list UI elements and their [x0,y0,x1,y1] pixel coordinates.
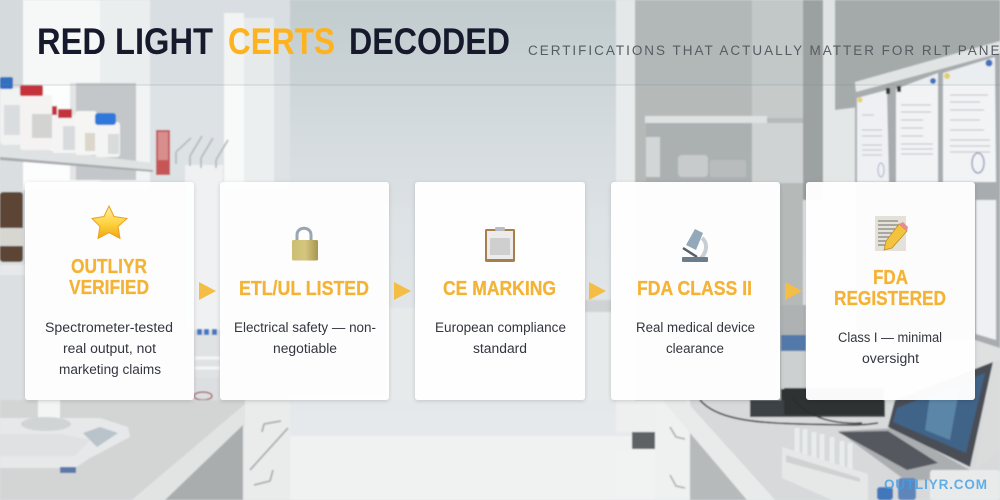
fire sign [156,130,170,175]
lower right shelf [389,308,616,400]
test tube caps [197,329,217,335]
text line 1: Electrical safety — non- [234,320,376,335]
bottle 5 label [108,134,119,154]
icon: microscope [682,229,708,262]
cap blue 1 [0,77,13,89]
shelf shade [0,157,153,172]
heading line 1: FDA [873,266,908,289]
certificate 1 [857,90,889,182]
upright light edge [70,83,76,180]
laptop keyboard [838,431,938,470]
scale foot [60,467,76,473]
memo paper [875,216,906,251]
clipboard board [485,229,515,262]
pin yellow 3 [944,73,950,79]
floor wall dark block [632,432,655,449]
cap red 3 [58,109,72,118]
padlock body [292,240,318,260]
padlock shackle [297,228,311,240]
microscope stage [683,248,697,257]
bottle 3 [52,115,76,153]
watermark: OUTLIYR.COM [884,477,987,492]
text line 2: clearance [666,341,724,356]
white door frame [823,0,858,200]
header tint band [0,0,1000,85]
title [37,21,510,62]
bottle white 2 [20,95,52,150]
pin blue 3 [986,60,992,66]
icon: star [92,206,127,238]
bottle 3 label [63,126,76,150]
text line 1: European compliance [435,320,566,335]
pin black 2 [897,86,901,92]
mid wall [150,0,290,190]
cap blue 5 [95,113,116,125]
left lower wall [0,190,290,400]
laptop base [838,428,970,480]
floor right [616,400,655,432]
laptop lid [888,362,993,467]
text line 2: negotiable [273,341,337,356]
card 4: FDA Class II [611,182,780,400]
balance scale glass [38,400,60,424]
board rim [855,41,1000,92]
strip band right [585,300,616,312]
floor lower right [616,449,655,500]
test tubes right [797,428,850,471]
arrow 2 [394,282,411,300]
card 5 panel [806,182,975,400]
pin yellow 1 [858,98,862,102]
balance scale body [0,418,130,468]
left wall strip [0,0,23,190]
lab shelf [0,144,153,170]
bottle small red cap [52,106,57,115]
cabinet handles [670,427,685,488]
certificate text lines [862,95,990,155]
right bottom cap 2 [898,478,916,500]
white column [616,0,635,400]
counter edge [132,400,273,500]
certificate stamp [972,153,984,173]
card 5 text [838,330,942,366]
drawers [245,400,290,500]
card 3: CE Marking [415,182,585,400]
alcove [635,0,803,400]
microscope arm [701,238,706,258]
text line 2: standard [473,341,527,356]
card 2 text [234,320,376,356]
reflection side [244,18,274,183]
balance scale top [0,434,90,456]
alcove box [710,160,746,177]
dark cabinet [165,425,243,500]
text line 1: Real medical device [636,320,755,335]
instrument base [781,351,806,389]
arrow 1 [199,282,216,300]
icon: memo and pencil [875,216,908,251]
lower right rim [975,340,1000,400]
red coil [194,392,212,400]
bottle right [930,470,1000,500]
text line 3: marketing claims [59,362,161,377]
drawer seam and handles [250,421,288,485]
certificate 3 [943,57,996,182]
alcove objects [678,155,708,177]
pencil eraser [899,222,908,231]
arrow 3 [589,282,606,300]
floor [290,436,660,500]
right bottom cap [877,487,893,500]
memo handwriting [878,221,902,245]
card 3 panel [415,182,585,400]
large wall [290,0,616,436]
card 2 panel [220,182,389,400]
bright window [23,0,100,190]
card 2: ETL/UL Listed [220,182,389,400]
text line 1: Spectrometer-tested [45,320,173,335]
right wall lower wedge [835,30,1000,110]
certificate 2 [896,73,938,182]
card 1 heading [69,255,149,299]
card 4 heading: FDA CLASS II [637,277,752,300]
light pillar [100,0,150,190]
strip instrument grey [781,305,806,335]
title: CERTS: CERTS [228,21,335,62]
alcove books [646,137,660,177]
text line 2: real output, not [63,341,156,356]
bottle 4 [75,111,97,155]
column shade [803,0,823,200]
lab counter left [0,400,250,500]
tube rack [782,447,868,500]
card 3 heading: CE MARKING [443,277,556,300]
text line 1: Class I — minimal [838,330,942,345]
instrument body [750,400,885,417]
card 1 text [45,320,173,377]
card 3 text [435,320,566,356]
pin blue 2 [930,78,936,84]
arrow 4 [785,282,802,300]
bottle 4 label [85,133,98,151]
card 1: Outliyr Verified [25,182,194,400]
clipboard paper [487,231,513,259]
white coat [185,165,223,330]
grey cabinet [690,432,747,500]
microscope tube [686,229,703,250]
text line 2: oversight [862,351,919,366]
card 2 heading: ETL/UL LISTED [239,277,369,300]
title: RED LIGHT: RED LIGHT [37,21,213,62]
white cabinet [655,400,690,500]
laptop screen glow [925,385,960,440]
lower shelf [0,265,25,275]
clipboard clip [495,227,505,231]
rack gap [786,455,860,482]
heading line 2: VERIFIED [69,276,149,299]
hooks [176,136,228,168]
instrument blue display [781,335,806,351]
bottle 1 label [4,105,21,135]
shelf metal upright [70,83,136,180]
bottle 2 label [32,114,52,138]
lower right certificate [976,200,996,340]
laptop screen [893,373,985,453]
icon: clipboard [485,227,515,262]
title: DECODED: DECODED [349,21,510,62]
alcove shelf [645,116,767,123]
laptop right counter [975,360,1000,470]
heading line 2: REGISTERED [834,287,946,310]
window reflection [224,13,244,183]
card 5 heading [834,266,946,310]
card 5: FDA Registered [806,182,975,400]
header divider [0,84,1000,86]
lower right board [975,182,1000,382]
brown bottles [0,192,23,262]
cap red 2 [20,85,43,96]
fire sign panel [158,132,168,160]
test tube rack lab [195,335,220,378]
brown bottle labels [0,228,23,246]
bottle white 1 [0,88,22,145]
alcove recess side [752,123,803,183]
cable [700,397,878,425]
clipboard text block [490,238,510,255]
pencil body [884,224,907,250]
counter white edge [662,400,775,500]
icon: padlock [292,228,318,260]
right counter [685,400,1000,500]
microscope base [682,257,708,262]
heading line 1: OUTLIYR [71,255,147,278]
instrument black [784,388,884,415]
card 1 panel [25,182,194,400]
alcove light side [752,0,803,118]
card 4 panel [611,182,780,400]
rack rows [195,358,220,368]
pin black 1 [886,88,890,94]
balance scale pan [21,417,71,431]
stamp small [878,163,884,177]
card 4 text [636,320,755,356]
alcove recess [646,123,766,183]
instrument dark strip [781,389,806,401]
bottle 5 [95,122,120,157]
right wall [835,0,1000,88]
certificate board [855,52,1000,340]
balance scale display [83,427,118,447]
